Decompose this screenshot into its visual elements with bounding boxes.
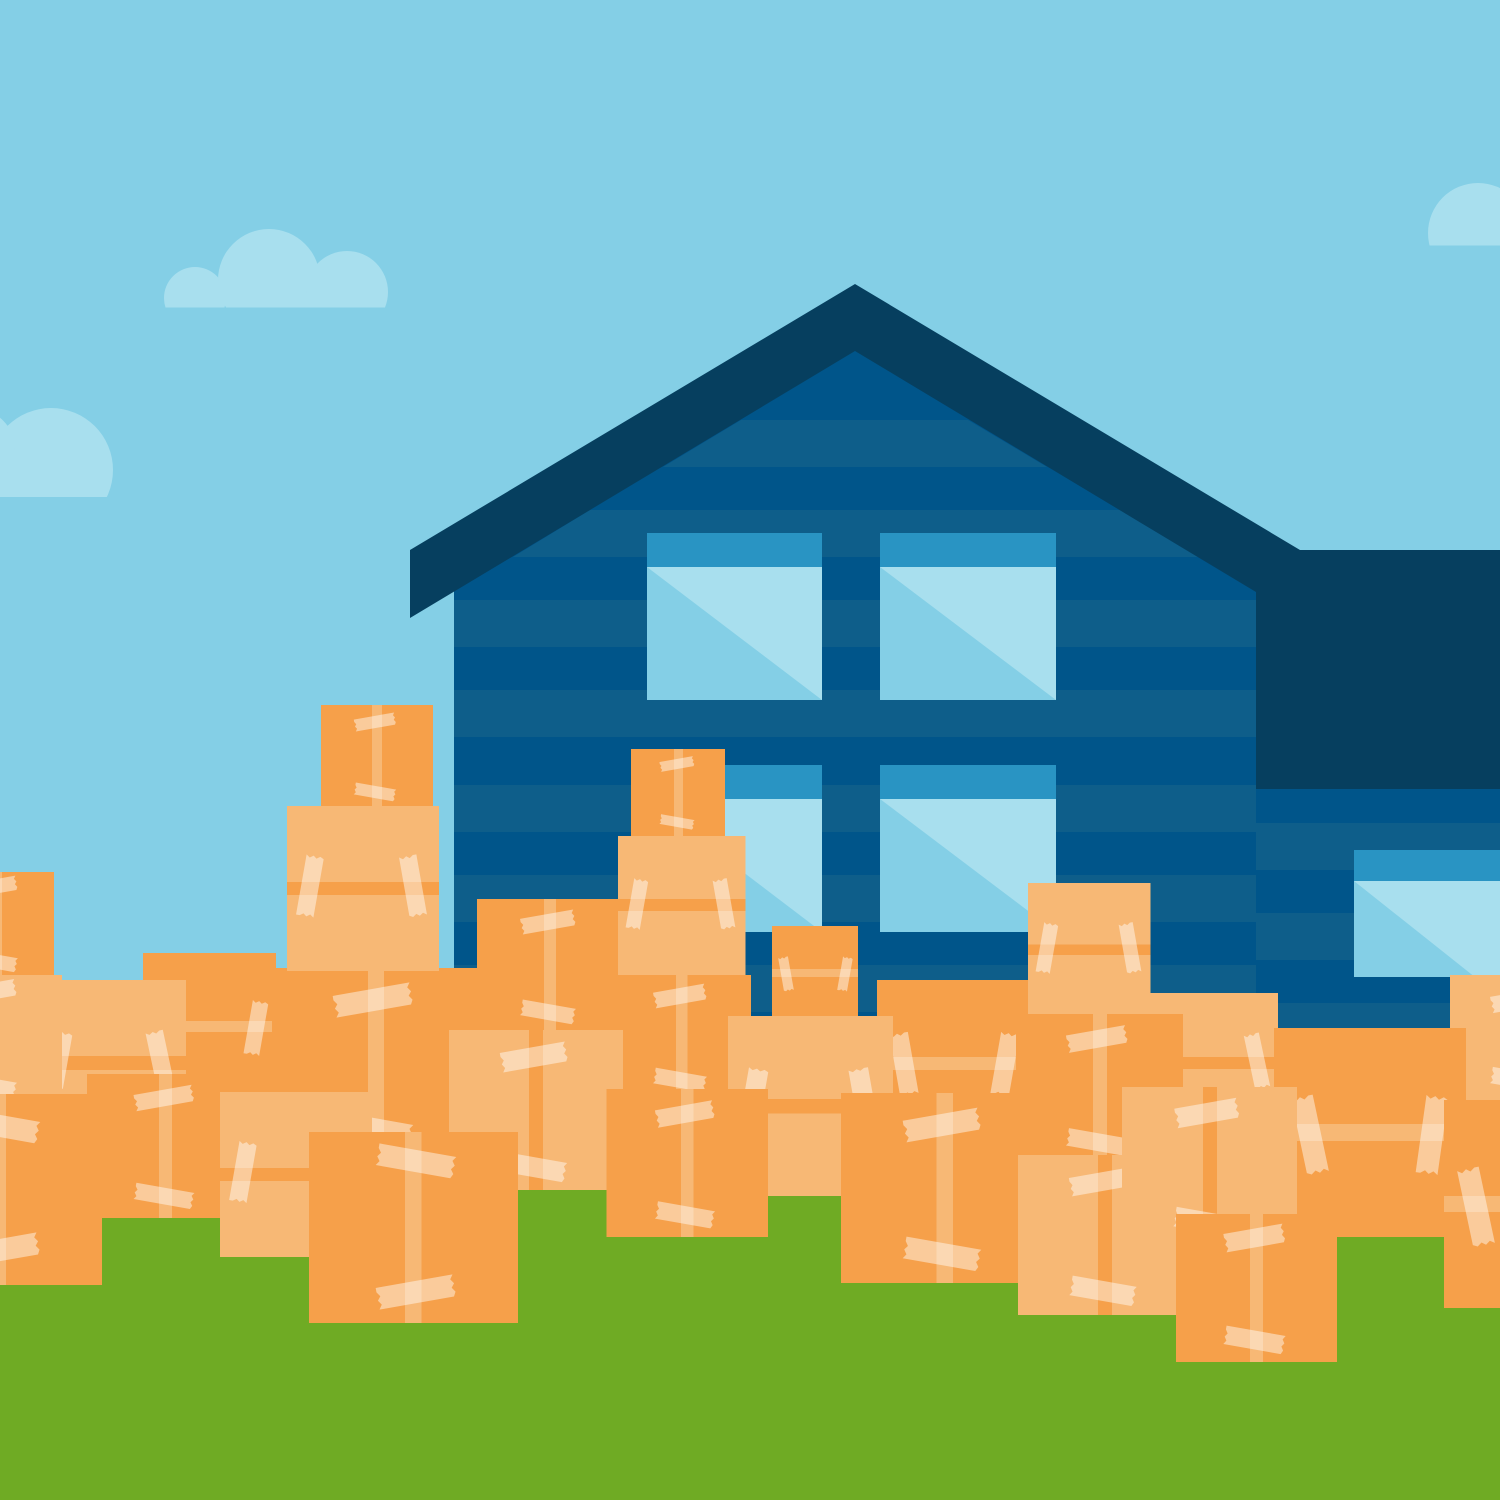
box: light far left: [0, 975, 62, 1100]
box: orange front centre right: [841, 1093, 1042, 1283]
box: light banded behind right: [1100, 993, 1278, 1133]
grass: [0, 1150, 1500, 1500]
window: upper right: [880, 533, 1056, 700]
cloud: upper left: [164, 229, 388, 308]
box: orange banded centre right: [877, 980, 1057, 1160]
window: upper left: [647, 533, 822, 700]
box: orange far right: [1444, 1100, 1500, 1308]
box: light with band: [449, 1030, 623, 1190]
box: large centre left: [273, 968, 477, 1148]
box: light far right back: [1450, 975, 1500, 1105]
box: orange large right: [1274, 1028, 1466, 1237]
box: light upper right front: [1122, 1087, 1297, 1247]
main wall: [454, 340, 1256, 1100]
window: lower right: [880, 765, 1056, 932]
box: light wide centre: [728, 1016, 893, 1196]
wall siding stripes: [454, 420, 1256, 1012]
box: orange behind centre: [477, 899, 620, 1099]
box: orange right stack base: [1016, 1014, 1183, 1194]
box: orange centre: [610, 975, 751, 1175]
side wing siding stripes: [1256, 823, 1500, 1050]
box: far left top: [0, 872, 54, 992]
box: light stacked: [287, 806, 439, 971]
box: top of centre stack: [631, 749, 725, 836]
box: light right stack top: [1028, 883, 1150, 1014]
box: orange front centre: [606, 1089, 768, 1237]
box: wide banded back left: [143, 953, 276, 1213]
box: orange bottom left: [0, 1094, 102, 1285]
side wing wall: [1256, 789, 1500, 1100]
box: light lower left: [220, 1092, 372, 1257]
cloud: right edge: [1428, 183, 1500, 246]
box: light lower right: [1018, 1155, 1190, 1315]
box: light centre stack: [618, 836, 746, 975]
window: side wing: [1354, 850, 1500, 997]
box: top of left stack: [321, 705, 433, 806]
roof: [410, 284, 1500, 789]
window: lower left: [647, 765, 822, 932]
box: large front left: [309, 1132, 518, 1323]
box: light left: [0, 980, 186, 1120]
box: small orange banded: [772, 926, 858, 1026]
parcels: [0, 705, 1500, 1362]
house: [410, 284, 1500, 1100]
box: orange front right: [1176, 1214, 1337, 1362]
box: orange lower left: [87, 1074, 243, 1218]
cloud: left edge: [0, 408, 113, 497]
